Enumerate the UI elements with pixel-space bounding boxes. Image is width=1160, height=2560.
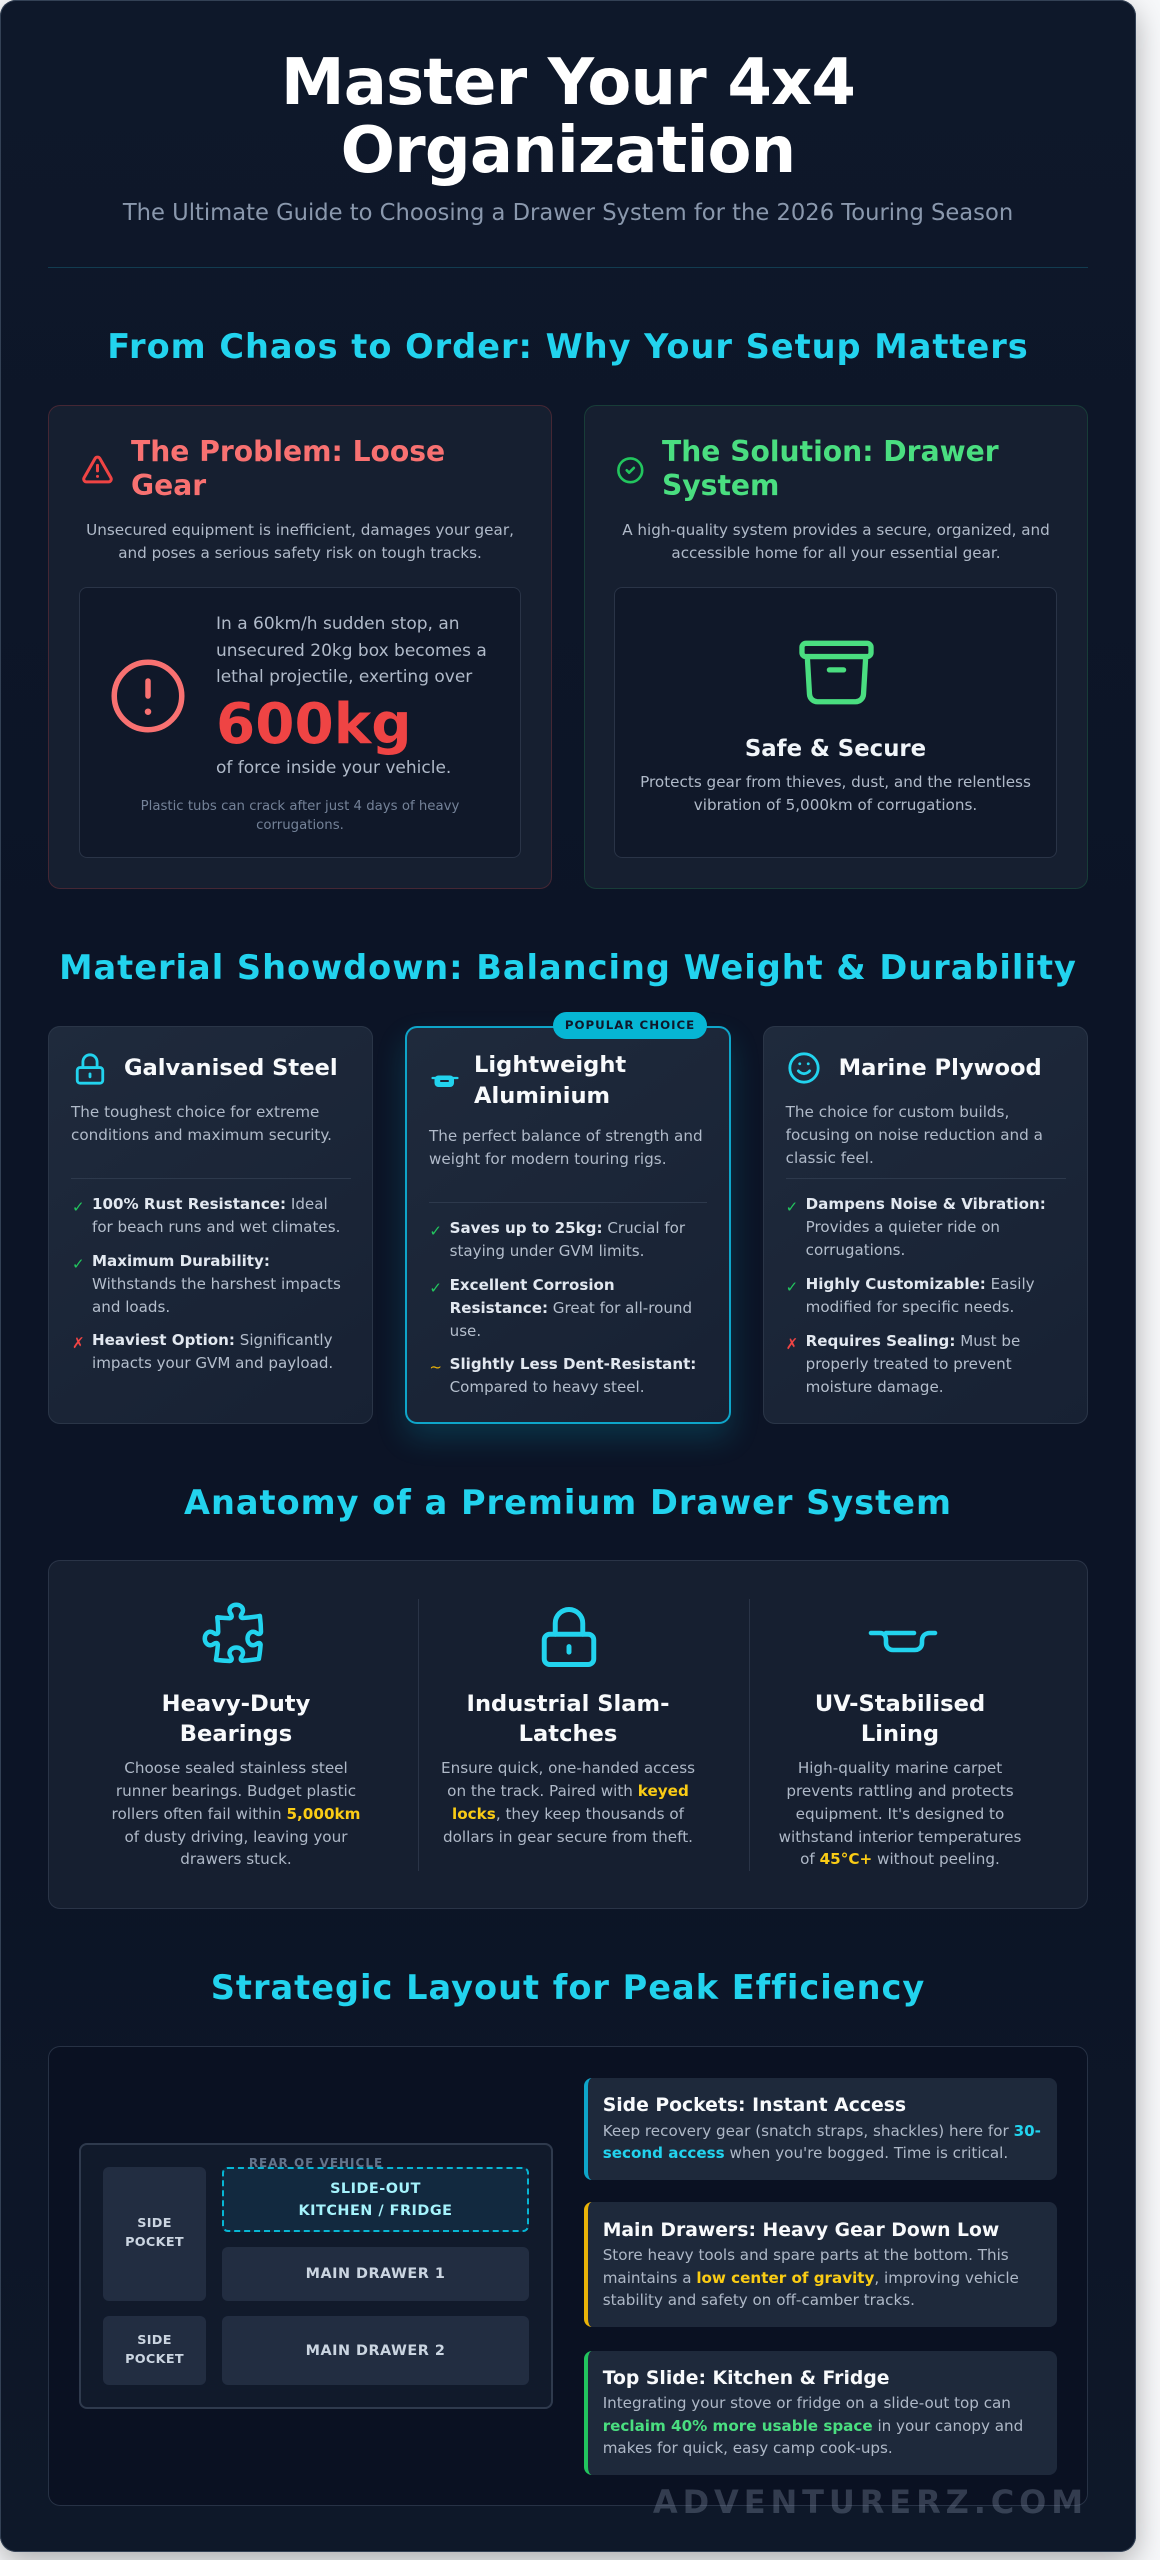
icon: archive box — [799, 640, 874, 704]
title: Master Your 4x4 — [281, 46, 855, 120]
main drawer 2 — [222, 2316, 529, 2385]
callout text: reclaim 40% more usable space in your canopy and — [603, 2417, 1023, 2435]
feature text — [441, 1759, 695, 1846]
card description: The choice for custom builds, — [786, 1103, 1009, 1121]
main drawer 1: MAIN DRAWER 1 — [306, 2266, 445, 2282]
tick mark: ✓ — [429, 1222, 442, 1240]
con: heaviest: impacts your GVM and payload. — [92, 1354, 333, 1372]
con: requires sealing: moisture damage. — [806, 1378, 944, 1396]
callout: side pockets — [584, 2078, 1057, 2180]
card title: Galvanised Steel — [124, 1054, 338, 1080]
heading: material showdown: Material Showdown: Balancing Weight & Durability — [59, 948, 1077, 986]
pro: dampens noise — [806, 1195, 1046, 1259]
heading: the problem: The Problem: Loose — [131, 435, 445, 468]
callout title: Main Drawers: Heavy Gear Down Low — [603, 2220, 999, 2241]
callout text — [603, 2244, 1019, 2312]
side pocket bottom: SIDE — [137, 2333, 172, 2348]
feature title: Industrial Slam- — [467, 1691, 669, 1717]
callout title: Top Slide: Kitchen & Fridge — [603, 2368, 890, 2389]
pro: saves weight — [450, 1219, 686, 1260]
feature text: withstand interior temperatures — [779, 1828, 1021, 1846]
feature text: rollers often fail within 5,000km — [112, 1805, 360, 1823]
tick mark: ✓ — [72, 1198, 85, 1216]
callout text — [603, 2120, 1041, 2164]
callout: 600kg force — [79, 587, 521, 858]
feature title: Latches — [519, 1721, 617, 1747]
heading: the solution: System — [662, 469, 779, 502]
icon: padlock — [542, 1607, 596, 1667]
pro: rust resistance — [92, 1195, 340, 1236]
feature text: runner bearings. Budget plastic — [116, 1782, 356, 1800]
subtitle: The Ultimate Guide to Choosing a Drawer System for the 2026 Touring Season — [123, 200, 1013, 226]
icon: smile — [788, 1052, 820, 1084]
card description — [428, 1127, 703, 1168]
feature text: locks, they keep thousands of — [452, 1805, 684, 1823]
callout: safe and secure — [614, 587, 1057, 858]
card description — [70, 1103, 332, 1144]
card description: classic feel. — [786, 1149, 874, 1167]
caveat: dent resistance: Compared to heavy steel. — [450, 1378, 645, 1396]
feature text: of dusty driving, leaving your — [124, 1828, 347, 1846]
panel: strategic layout — [48, 2046, 1088, 2506]
feature title: Lining — [861, 1721, 939, 1747]
callout title: Side Pockets: Instant Access — [603, 2095, 906, 2116]
pro: dampens noise: corrugations. — [806, 1241, 905, 1259]
feature text: prevents rattling and protects — [786, 1782, 1014, 1800]
icon: warning triangle — [82, 456, 113, 484]
footnote: corrugations. — [256, 818, 344, 833]
feature text: equipment. It's designed to — [796, 1805, 1004, 1823]
feature text — [779, 1759, 1021, 1868]
callout: main drawers — [584, 2202, 1057, 2327]
card title: Lightweight — [474, 1052, 626, 1078]
card title — [474, 1052, 626, 1108]
con: requires sealing: Requires Sealing: Must be — [806, 1332, 1020, 1350]
heading: the problem: Gear — [131, 469, 206, 502]
cross mark: ✗ — [72, 1334, 85, 1352]
pro: corrosion resistance: use. — [450, 1322, 481, 1340]
card description: conditions and maximum security. — [71, 1126, 332, 1144]
heading: from chaos to order: From Chaos to Order: Why Your Setup Matters — [107, 327, 1029, 366]
safe and secure text — [640, 773, 1031, 814]
feature text: drawers stuck. — [180, 1850, 292, 1868]
caveat: dent resistance: Slightly Less Dent-Resistant: — [450, 1355, 696, 1373]
title — [281, 46, 855, 188]
solution description — [622, 521, 1050, 562]
safe and secure text: Protects gear from thieves, dust, and the relentless — [640, 773, 1031, 791]
callout text — [603, 2392, 1023, 2460]
heading: the problem — [131, 435, 445, 502]
force explanation text: lethal projectile, exerting over — [216, 667, 472, 687]
side pocket top — [103, 2167, 206, 2301]
feature title — [815, 1691, 985, 1747]
panel: lightweight aluminium — [405, 1026, 731, 1424]
feature title — [162, 1691, 310, 1747]
solution description: A high-quality system provides a secure, organized, and — [622, 521, 1050, 539]
badge: popular choice — [553, 1012, 707, 1039]
stat: 600kg: 600kg — [216, 692, 412, 757]
problem description — [86, 521, 514, 562]
pro: corrosion resistance: Excellent Corrosion — [450, 1276, 615, 1294]
callout text: Keep recovery gear (snatch straps, shackles) here for 30- — [603, 2122, 1041, 2140]
badge: popular choice: POPULAR CHOICE — [565, 1018, 695, 1032]
pro: saves weight: staying under GVM limits. — [450, 1242, 644, 1260]
feature text: Choose sealed stainless steel — [124, 1759, 348, 1777]
panel: marine plywood — [763, 1026, 1088, 1424]
icon: check circle — [617, 457, 644, 484]
icon: aluminium tray — [431, 1076, 459, 1087]
pro: rust resistance: 100% Rust Resistance: Ideal — [92, 1195, 328, 1213]
pro: durability: and loads. — [92, 1298, 170, 1316]
pro: customizable: Highly Customizable: Easily — [806, 1275, 1035, 1293]
icon: puzzle piece — [202, 1602, 264, 1664]
solution description: accessible home for all your essential gear. — [671, 544, 1001, 562]
heading: the solution: The Solution: Drawer — [662, 435, 999, 468]
side pocket top: SIDE — [137, 2216, 172, 2231]
feature: bearings — [112, 1602, 360, 1868]
title: Organization — [341, 114, 795, 188]
icon: alert circle — [112, 660, 184, 732]
cross mark: ✗ — [786, 1335, 798, 1353]
panel: anatomy features — [48, 1560, 1088, 1909]
feature text: of 45°C+ without peeling. — [800, 1850, 1000, 1868]
slide-out kitchen — [222, 2167, 529, 2232]
pro: rust resistance: for beach runs and wet climates. — [92, 1218, 340, 1236]
panel: the solution — [584, 405, 1088, 889]
tick mark: ✓ — [786, 1278, 798, 1296]
problem description: and poses a serious safety risk on tough tracks. — [118, 544, 482, 562]
con: heaviest — [92, 1331, 333, 1372]
feature title — [467, 1691, 669, 1747]
heading: strategic layout: Strategic Layout for Peak Efficiency — [211, 1968, 925, 2006]
pro: durability: Maximum Durability: — [92, 1252, 270, 1270]
feature text: Ensure quick, one-handed access — [441, 1759, 695, 1777]
main drawer 2: MAIN DRAWER 2 — [306, 2342, 445, 2358]
feature text — [112, 1759, 360, 1868]
callout text: stability and safety on off-camber tracks. — [603, 2291, 915, 2309]
feature text: dollars in gear secure from theft. — [443, 1828, 693, 1846]
card description — [786, 1103, 1043, 1167]
con: requires sealing — [806, 1332, 1020, 1396]
watermark: ADVENTURERZ.COM — [653, 2483, 1088, 2521]
panel: galvanised steel — [48, 1026, 373, 1424]
card title: Aluminium — [474, 1082, 610, 1108]
side pocket bottom: POCKET — [125, 2352, 184, 2366]
slide-out kitchen: KITCHEN / FRIDGE — [299, 2202, 452, 2218]
icon: padlock — [76, 1053, 104, 1085]
tick mark: ✓ — [429, 1279, 442, 1297]
slide-out kitchen: SLIDE-OUT — [330, 2180, 421, 2196]
feature: lining — [779, 1630, 1021, 1868]
pro: dampens noise: Dampens Noise & Vibration: — [806, 1195, 1046, 1213]
callout text: Integrating your stove or fridge on a slide-out top can — [603, 2394, 1011, 2412]
con: heaviest: Heaviest Option: Significantly — [92, 1331, 333, 1349]
footnote — [141, 799, 459, 833]
card description: The toughest choice for extreme — [71, 1103, 319, 1121]
side pocket bottom — [103, 2316, 206, 2385]
force explanation text: unsecured 20kg box becomes a — [216, 641, 487, 661]
card description: The perfect balance of strength and — [429, 1127, 703, 1145]
callout text: second access when you're bogged. Time is critical. — [603, 2144, 1008, 2162]
caveat: dent resistance — [450, 1355, 696, 1396]
side pocket top: POCKET — [125, 2235, 184, 2250]
pro: customizable: modified for specific needs. — [806, 1298, 1014, 1316]
feature: latches — [441, 1607, 695, 1846]
callout text: makes for quick, easy camp cook-ups. — [603, 2439, 893, 2457]
card description: weight for modern touring rigs. — [429, 1150, 667, 1168]
pro: durability — [92, 1252, 341, 1316]
heading: anatomy: Anatomy of a Premium Drawer System — [184, 1482, 952, 1522]
footnote: Plastic tubs can crack after just 4 days of heavy — [141, 799, 459, 814]
feature title: Heavy-Duty — [162, 1691, 310, 1717]
tick mark: ✓ — [72, 1255, 85, 1273]
pro: corrosion resistance: Resistance: Great for all-round — [450, 1299, 692, 1317]
safe and secure heading: Safe & Secure — [745, 736, 926, 762]
pro: corrosion resistance — [450, 1276, 692, 1340]
tilde mark: ~ — [429, 1358, 442, 1376]
main drawer 1 — [222, 2247, 529, 2301]
card description: focusing on noise reduction and a — [786, 1126, 1043, 1144]
callout: top slide — [584, 2350, 1057, 2475]
problem description: Unsecured equipment is inefficient, damages your gear, — [86, 521, 514, 539]
feature title: UV-Stabilised — [815, 1691, 985, 1717]
panel: the problem — [48, 405, 552, 889]
force explanation text — [216, 614, 487, 687]
callout text: maintains a low center of gravity, improving vehicle — [603, 2269, 1019, 2287]
con: requires sealing: properly treated to prevent — [806, 1355, 1012, 1373]
card title: Marine Plywood — [839, 1054, 1042, 1080]
diagram: drawer layout — [79, 2143, 553, 2409]
label: rear of vehicle: REAR OF VEHICLE — [249, 2156, 383, 2170]
pro: customizable — [806, 1275, 1035, 1316]
tick mark: ✓ — [786, 1198, 798, 1216]
force explanation text: In a 60km/h sudden stop, an — [216, 614, 460, 634]
stat caption: of force inside your vehicle. — [216, 758, 451, 778]
pro: saves weight: Saves up to 25kg: Crucial for — [450, 1219, 685, 1237]
callout text: Store heavy tools and spare parts at the bottom. This — [603, 2246, 1009, 2264]
safe and secure text: vibration of 5,000km of corrugations. — [694, 796, 977, 814]
feature text: on the track. Paired with keyed — [447, 1782, 689, 1800]
feature text: High-quality marine carpet — [798, 1759, 1002, 1777]
pro: dampens noise: Provides a quieter ride on — [806, 1218, 1000, 1236]
heading: the solution — [662, 435, 999, 502]
icon: lined tray — [868, 1630, 938, 1652]
pro: durability: Withstands the harshest impacts — [92, 1275, 341, 1293]
feature title: Bearings — [180, 1721, 292, 1747]
